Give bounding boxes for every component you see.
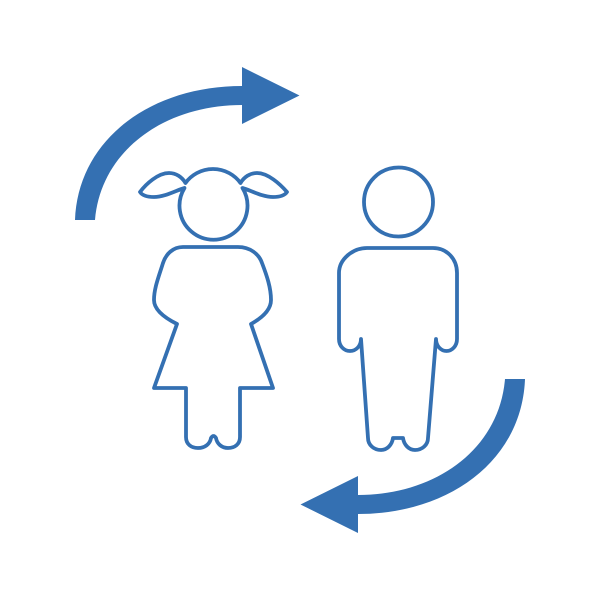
- boy head: [364, 168, 433, 236]
- arrow: bottom, pointing left: [300, 379, 525, 533]
- figure: boy: [339, 168, 457, 450]
- girl body with dress: [154, 247, 273, 448]
- girl head with pigtails: [140, 169, 287, 240]
- arrow: top, pointing right: [75, 67, 300, 220]
- figure: girl: [140, 169, 287, 448]
- boy body: [339, 248, 457, 450]
